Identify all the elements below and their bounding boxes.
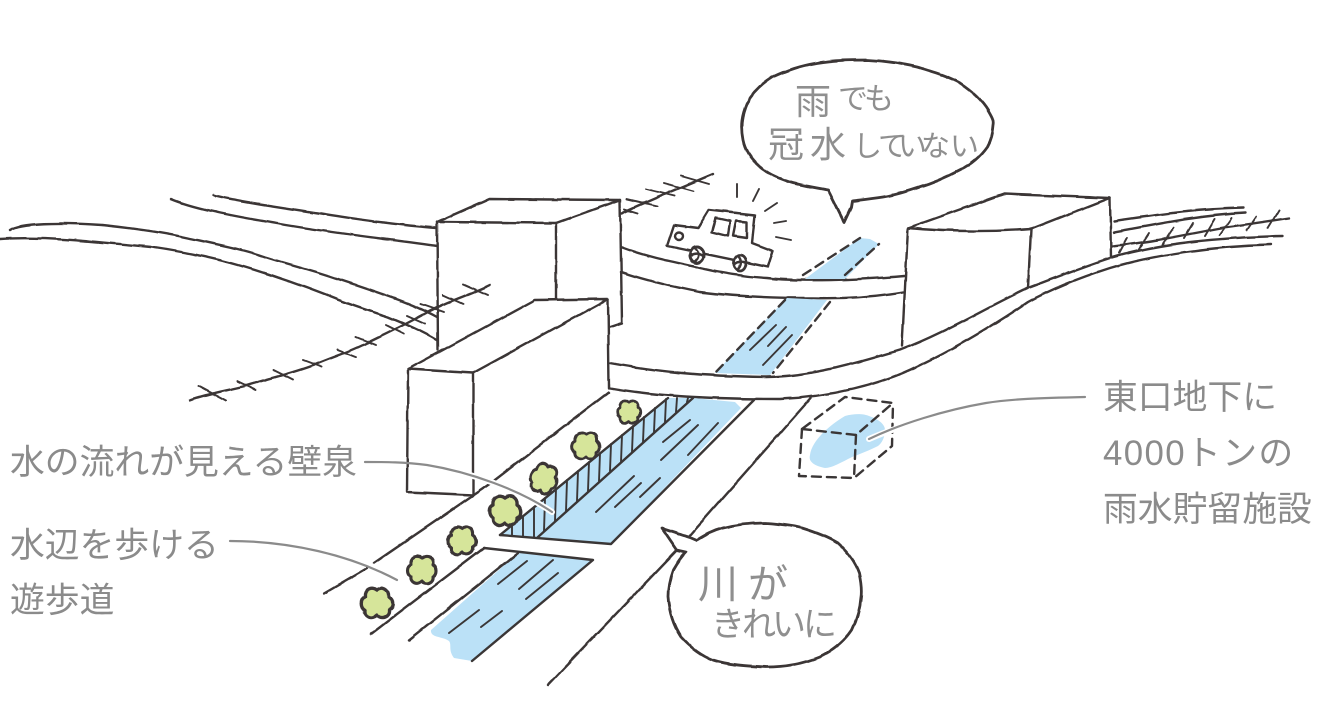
speech bubble: river is clean: 川が [698,563,788,607]
river: lower section [431,548,593,661]
label: waterside promenade: 水辺を歩ける [10,526,219,565]
label: rainwater storage facility [869,378,1312,529]
speech bubble: no flooding even in rain: していない [853,131,979,163]
icon: car [667,210,773,271]
label: rainwater storage facility: 雨水貯留施設 [1103,490,1312,529]
label: wall fountain [10,443,552,512]
label: rainwater storage facility: 東口地下に [1103,378,1277,417]
label: rainwater storage facility: 4000トンの [1103,434,1295,473]
label: waterside promenade: 遊歩道 [10,581,114,620]
road: lower curved road [610,236,1282,399]
speech bubble: no flooding even in rain [742,60,993,222]
icon: car motion rays [737,184,791,240]
speech bubble: river is clean: きれいに [711,606,837,644]
label: wall fountain: 水の流れが見える壁泉 [10,443,357,482]
railway: left foreground tracks [190,284,490,401]
railway: right far tracks [1076,208,1289,255]
road: left far roads [0,195,437,340]
building: right block [902,194,1111,346]
speech bubble: no flooding even in rain: 雨 [795,81,831,122]
speech bubble: river is clean [662,523,861,667]
label: waterside promenade [10,526,397,620]
walkway edges and road [324,392,811,685]
speech bubble: no flooding even in rain: でも [838,83,894,116]
trees along the walkway [361,401,641,617]
river: open section with visible wall fountain [500,398,754,544]
river: culverted section under road (dashed) [715,238,879,375]
building: front left block [407,299,609,495]
road: upper curved road with car [621,247,904,298]
storage tank: underground rainwater facility [799,397,893,478]
speech bubble: no flooding even in rain: 冠水 [768,124,846,165]
building: upper left block [437,199,622,350]
railway: top centre tracks [622,174,713,213]
